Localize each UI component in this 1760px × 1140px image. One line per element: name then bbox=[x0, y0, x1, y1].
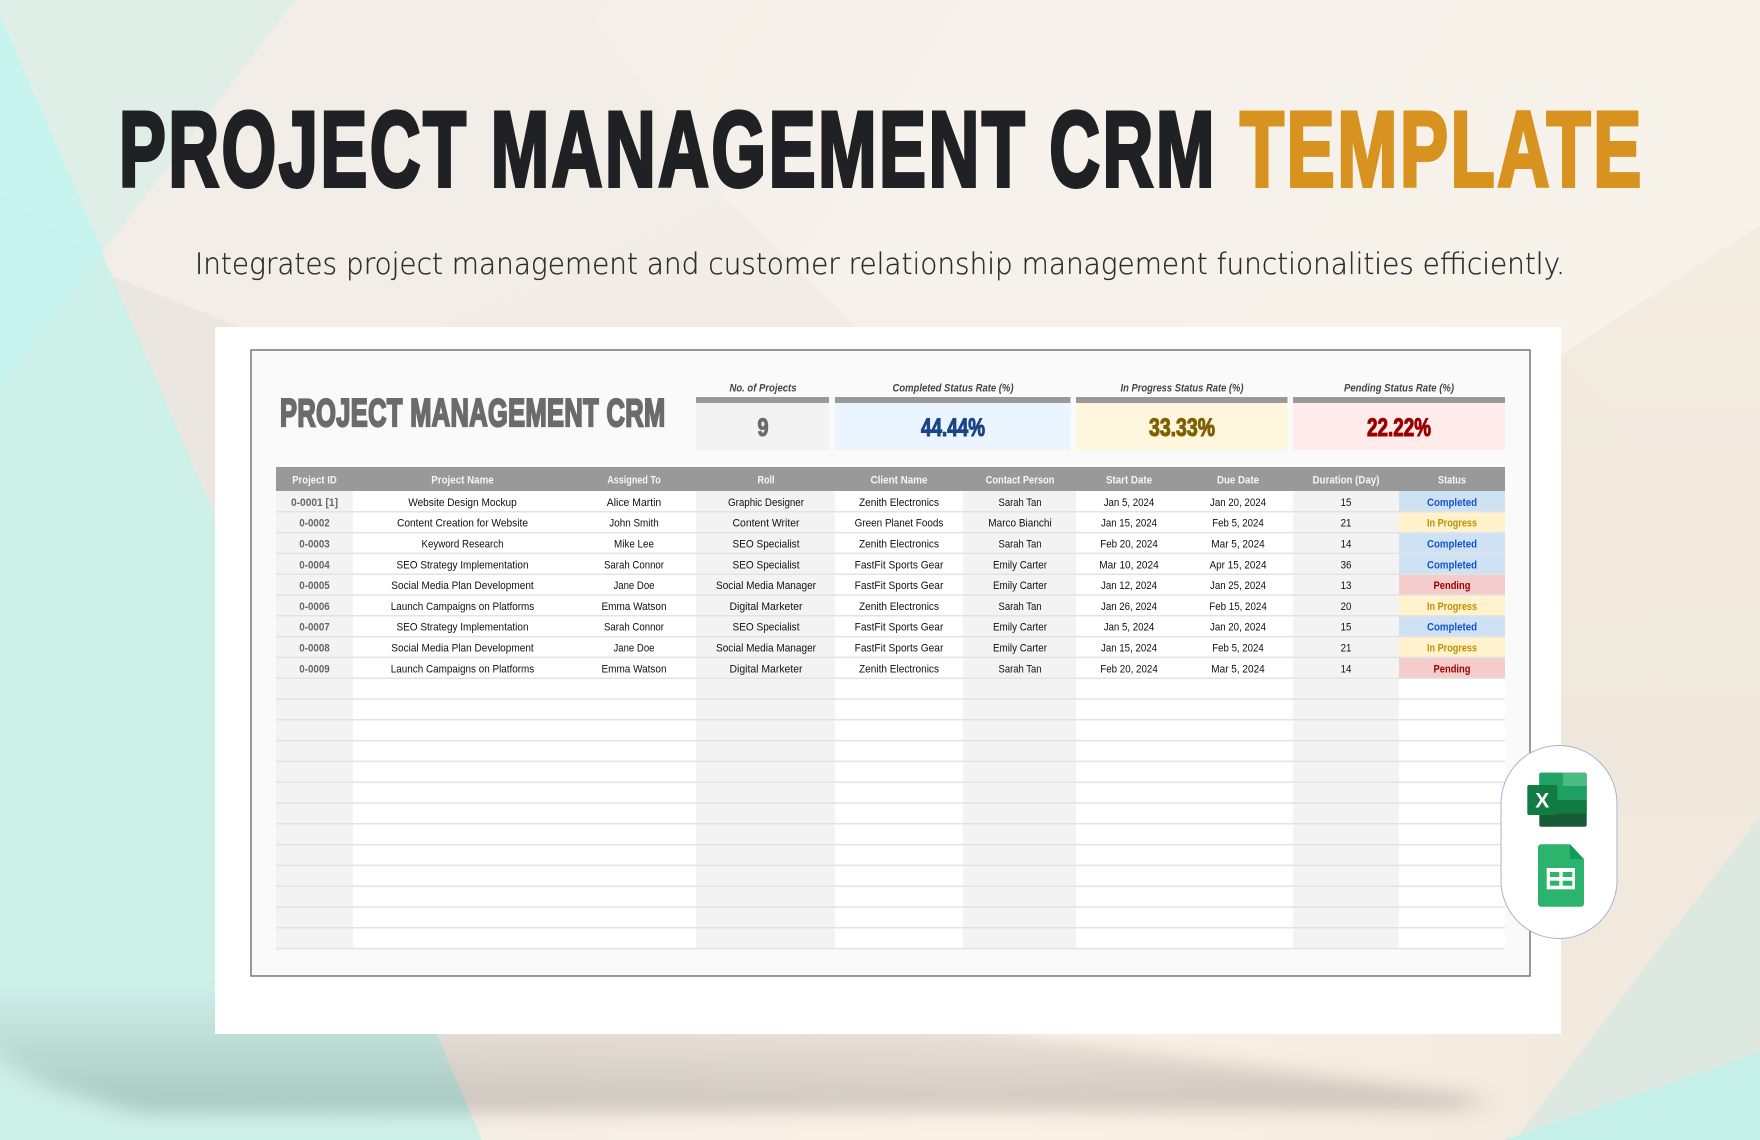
row 0-0001: Alice Martin bbox=[607, 497, 661, 509]
KPI: completed rate bbox=[835, 383, 1070, 450]
row 0-0004: SEO Strategy Implementation bbox=[396, 559, 528, 571]
KPI: pending rate: 22.22% bbox=[1367, 414, 1431, 442]
row 0-0008: Jane Doe bbox=[614, 642, 654, 654]
panel: spreadsheet bbox=[251, 350, 1530, 976]
KPI: completed rate: Completed Status Rate (%) bbox=[892, 383, 1014, 395]
row 0-0009: Zenith Electronics bbox=[859, 663, 939, 675]
row 0-0002: 21 bbox=[1341, 518, 1351, 530]
row 0-0006: 0-0006 bbox=[299, 601, 330, 613]
row 0-0007: 15 bbox=[1341, 622, 1351, 634]
row 0-0009: Digital Marketer bbox=[730, 663, 803, 675]
row 0-0005: Jan 12, 2024 bbox=[1101, 580, 1157, 592]
table bbox=[276, 467, 1505, 949]
app badge pill bbox=[1501, 746, 1617, 938]
row 0-0001: 0-0001 [1] bbox=[291, 497, 338, 509]
row 0-0001: Sarah Tan bbox=[998, 497, 1042, 509]
row 0-0007: Completed bbox=[1427, 622, 1477, 634]
row 0-0007: Emily Carter bbox=[993, 622, 1047, 634]
row 0-0002: In Progress bbox=[1427, 518, 1477, 530]
row 0-0008: Social Media Manager bbox=[716, 642, 816, 654]
row 0-0006: Emma Watson bbox=[602, 601, 666, 613]
row 0-0006: 20 bbox=[1341, 601, 1351, 613]
row 0-0001 bbox=[291, 497, 1477, 509]
table header: Project Name bbox=[431, 474, 494, 486]
row 0-0005: Pending bbox=[1434, 580, 1471, 592]
row 0-0003: Mike Lee bbox=[614, 538, 654, 550]
row 0-0007: Jan 5, 2024 bbox=[1104, 622, 1154, 634]
row 0-0009: 14 bbox=[1341, 663, 1351, 675]
row 0-0009: Sarah Tan bbox=[998, 663, 1042, 675]
row 0-0001: Jan 20, 2024 bbox=[1210, 497, 1266, 509]
row 0-0006: Launch Campaigns on Platforms bbox=[391, 601, 535, 613]
row 0-0007: SEO Strategy Implementation bbox=[396, 622, 528, 634]
row 0-0005 bbox=[299, 580, 1471, 592]
table header: Status bbox=[1438, 474, 1466, 486]
icon: Excel: X bbox=[1535, 790, 1549, 812]
row 0-0008: Social Media Plan Development bbox=[391, 642, 534, 654]
table header: Due Date bbox=[1217, 474, 1259, 486]
row 0-0003: Completed bbox=[1427, 538, 1477, 550]
row 0-0004: Sarah Connor bbox=[604, 559, 664, 571]
row 0-0001: Graphic Designer bbox=[728, 497, 804, 509]
row 0-0009: Emma Watson bbox=[602, 663, 666, 675]
table header: Project ID bbox=[292, 474, 337, 486]
row 0-0007: Sarah Connor bbox=[604, 622, 664, 634]
KPI: number of projects: No. of Projects bbox=[730, 383, 796, 395]
row 0-0005: Social Media Plan Development bbox=[391, 580, 534, 592]
row 0-0004: FastFit Sports Gear bbox=[855, 559, 944, 571]
row 0-0003: Feb 20, 2024 bbox=[1100, 538, 1158, 550]
row 0-0003: 14 bbox=[1341, 538, 1351, 550]
row 0-0005: Emily Carter bbox=[993, 580, 1047, 592]
row 0-0006: Digital Marketer bbox=[730, 601, 803, 613]
table header: Assigned To bbox=[607, 474, 661, 486]
KPI: completed rate: 44.44% bbox=[921, 414, 985, 442]
row 0-0006: Zenith Electronics bbox=[859, 601, 939, 613]
row 0-0008: FastFit Sports Gear bbox=[855, 642, 944, 654]
row 0-0009: Pending bbox=[1434, 663, 1471, 675]
row 0-0004: 0-0004 bbox=[299, 559, 330, 571]
subtitle: Integrates project management and customer relationship management functionalities efficiently. bbox=[195, 247, 1565, 281]
row 0-0003: 0-0003 bbox=[299, 538, 330, 550]
table header: Start Date bbox=[1106, 474, 1152, 486]
row 0-0009 bbox=[299, 663, 1471, 675]
KPI: pending rate: Pending Status Rate (%) bbox=[1344, 383, 1454, 395]
row 0-0004: Emily Carter bbox=[993, 559, 1047, 571]
row 0-0007: 0-0007 bbox=[299, 622, 330, 634]
row 0-0001: Jan 5, 2024 bbox=[1104, 497, 1154, 509]
row 0-0009: Mar 5, 2024 bbox=[1211, 663, 1265, 675]
row 0-0005: 0-0005 bbox=[299, 580, 330, 592]
table header bbox=[276, 467, 1505, 491]
row 0-0007: FastFit Sports Gear bbox=[855, 622, 944, 634]
row 0-0009: Feb 20, 2024 bbox=[1100, 663, 1158, 675]
row 0-0005: Jan 25, 2024 bbox=[1210, 580, 1266, 592]
row 0-0003: SEO Specialist bbox=[732, 538, 800, 550]
KPI: in progress rate: 33.33% bbox=[1149, 414, 1215, 442]
row 0-0005: 13 bbox=[1341, 580, 1351, 592]
row 0-0003 bbox=[299, 538, 1477, 550]
row 0-0002 bbox=[299, 518, 1477, 530]
title: PROJECT MANAGEMENT CRM bbox=[119, 89, 1217, 209]
row 0-0001: Completed bbox=[1427, 497, 1477, 509]
panel: white card bbox=[215, 327, 1561, 1034]
row 0-0002: Feb 5, 2024 bbox=[1212, 518, 1264, 530]
icon: Google Sheets bbox=[1538, 844, 1584, 907]
row 0-0001: Zenith Electronics bbox=[859, 497, 939, 509]
row 0-0008: Jan 15, 2024 bbox=[1101, 642, 1157, 654]
row 0-0006 bbox=[299, 601, 1477, 613]
row 0-0002: Jan 15, 2024 bbox=[1101, 518, 1157, 530]
row 0-0002: John Smith bbox=[609, 518, 659, 530]
row 0-0006: Sarah Tan bbox=[998, 601, 1042, 613]
row 0-0003: Keyword Research bbox=[422, 538, 504, 550]
row 0-0002: 0-0002 bbox=[299, 518, 330, 530]
row 0-0006: Feb 15, 2024 bbox=[1209, 601, 1267, 613]
row 0-0002: Content Writer bbox=[732, 518, 800, 530]
table header: Contact Person bbox=[986, 474, 1055, 486]
table header: Duration (Day) bbox=[1312, 474, 1380, 486]
row 0-0008: Emily Carter bbox=[993, 642, 1047, 654]
row 0-0008: 0-0008 bbox=[299, 642, 330, 654]
row 0-0004: Apr 15, 2024 bbox=[1210, 559, 1266, 571]
row 0-0008: 21 bbox=[1341, 642, 1351, 654]
row 0-0004: 36 bbox=[1341, 559, 1351, 571]
row 0-0003: Zenith Electronics bbox=[859, 538, 939, 550]
row 0-0008 bbox=[299, 642, 1477, 654]
row 0-0006: In Progress bbox=[1427, 601, 1477, 613]
row 0-0007: SEO Specialist bbox=[732, 622, 800, 634]
row 0-0009: 0-0009 bbox=[299, 663, 330, 675]
table header: Roll bbox=[758, 474, 774, 486]
row 0-0006: Jan 26, 2024 bbox=[1101, 601, 1157, 613]
row 0-0005: Social Media Manager bbox=[716, 580, 816, 592]
row 0-0001: Website Design Mockup bbox=[408, 497, 517, 509]
row 0-0001: 15 bbox=[1341, 497, 1351, 509]
row 0-0005: Jane Doe bbox=[614, 580, 654, 592]
status cell fills bbox=[1399, 491, 1505, 678]
row 0-0004: Mar 10, 2024 bbox=[1099, 559, 1159, 571]
row 0-0004 bbox=[299, 559, 1477, 571]
row 0-0002: Content Creation for Website bbox=[397, 518, 528, 530]
icon: Excel bbox=[1527, 773, 1587, 827]
row 0-0002: Green Planet Foods bbox=[855, 518, 944, 530]
KPI: in progress rate bbox=[1076, 383, 1288, 450]
KPI: pending rate bbox=[1293, 383, 1505, 450]
KPI: number of projects bbox=[696, 383, 829, 450]
table header: Client Name bbox=[870, 474, 928, 486]
row 0-0005: FastFit Sports Gear bbox=[855, 580, 944, 592]
row 0-0003: Sarah Tan bbox=[998, 538, 1042, 550]
row 0-0008: In Progress bbox=[1427, 642, 1477, 654]
KPI: in progress rate: In Progress Status Rate (%) bbox=[1120, 383, 1244, 395]
row 0-0008: Feb 5, 2024 bbox=[1212, 642, 1264, 654]
row 0-0004: SEO Specialist bbox=[732, 559, 800, 571]
row 0-0007 bbox=[299, 622, 1477, 634]
row 0-0009: Launch Campaigns on Platforms bbox=[391, 663, 535, 675]
row 0-0007: Jan 20, 2024 bbox=[1210, 622, 1266, 634]
KPI: number of projects: 9 bbox=[758, 414, 768, 442]
row 0-0002: Marco Bianchi bbox=[988, 518, 1052, 530]
row 0-0003: Mar 5, 2024 bbox=[1211, 538, 1265, 550]
spreadsheet heading: PROJECT MANAGEMENT CRM bbox=[280, 392, 666, 435]
row 0-0004: Completed bbox=[1427, 559, 1477, 571]
